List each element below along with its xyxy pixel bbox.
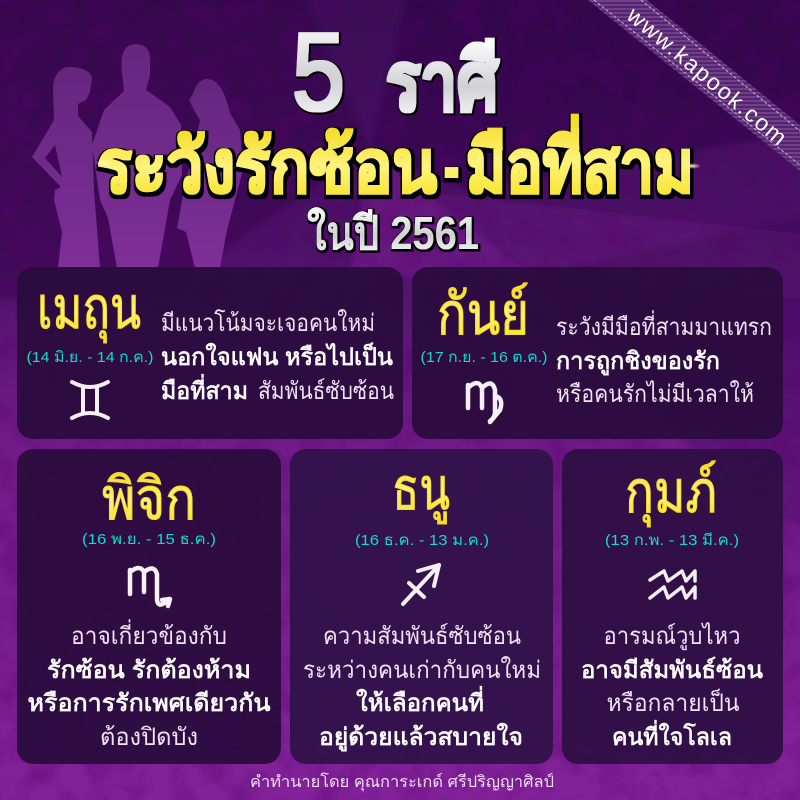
description: อารมณ์วูบไหว xyxy=(604,622,740,651)
sign name: ธนู xyxy=(392,457,450,524)
ribbon: www.kapook.com xyxy=(588,0,800,171)
icon: aquarius xyxy=(650,571,695,598)
description: ต้องปิดบัง xyxy=(100,724,198,751)
icon: sagittarius xyxy=(403,565,439,604)
description: มือที่สาม xyxy=(161,374,248,405)
panel: พิจิก xyxy=(17,449,281,764)
sign name: พิจิก xyxy=(102,467,196,532)
panel: กุมภ์ xyxy=(562,449,783,764)
description: การถูกชิงของรัก xyxy=(556,348,720,376)
icon: virgo xyxy=(468,383,501,422)
icon: gemini xyxy=(72,382,108,418)
date range: (14 มิ.ย. - 14 ก.ค.) xyxy=(26,349,154,366)
silhouette: left woman xyxy=(32,67,100,268)
silhouettes: three people xyxy=(32,44,243,268)
panel: เมถุน xyxy=(17,267,403,439)
title: ระวังรักซ้อน-มือที่สาม: มือที่สาม xyxy=(466,114,694,208)
footer credit: คำทำนายโดย คุณการะเกด์ ศรีปริญญาศิลป์ xyxy=(250,772,554,792)
silhouette: right woman xyxy=(177,79,243,268)
title: ระวังรักซ้อน-มือที่สาม: ระวังรักซ้อน xyxy=(97,125,437,208)
date range: (17 ก.ย. - 16 ต.ค.) xyxy=(420,349,548,366)
title: ระวังรักซ้อน-มือที่สาม xyxy=(95,114,701,208)
title: ระวังรักซ้อน-มือที่สาม: - xyxy=(444,125,459,208)
description: คนที่ใจโลเล xyxy=(612,720,732,751)
description xyxy=(581,622,763,751)
title: 5 ราศี xyxy=(292,11,500,134)
title: 5 ราศี: ราศี xyxy=(386,37,500,128)
description xyxy=(28,619,270,751)
description xyxy=(556,310,772,408)
description: อาจมีสัมพันธ์ซ้อน xyxy=(581,656,763,684)
panel: กันย์ xyxy=(412,267,783,439)
description xyxy=(303,622,541,752)
description: ระหว่างคนเก่ากับคนใหม่ xyxy=(303,656,541,684)
description: อยู่ด้วยแล้วสบายใจ xyxy=(319,723,523,752)
description: อาจเกี่ยวข้องกับ xyxy=(71,619,227,650)
date range: (16 พ.ย. - 15 ธ.ค.) xyxy=(82,531,216,548)
sign name: เมถุน xyxy=(37,276,141,344)
ribbon: www.kapook.com: www.kapook.com xyxy=(621,1,792,150)
description: หรือคนรักไม่มีเวลาให้ xyxy=(556,380,754,408)
date range: (13 ก.พ. - 13 มี.ค.) xyxy=(605,532,739,549)
description: รักซ้อน รักต้องห้าม xyxy=(47,657,251,684)
description: ให้เลือกคนที่ xyxy=(356,686,484,717)
description xyxy=(161,309,394,405)
description: หรือกลายเป็น xyxy=(606,688,740,717)
description: ระวังมีมือที่สามมาแทรก xyxy=(556,310,772,341)
icon: scorpio xyxy=(130,568,170,606)
description: นอกใจแฟน หรือไปเป็น xyxy=(161,342,393,371)
description: มีแนวโน้มจะเจอคนใหม่ xyxy=(161,309,375,337)
description: ความสัมพันธ์ซับซ้อน xyxy=(323,622,521,650)
silhouette: centre man xyxy=(92,44,182,268)
description: หรือการรักเพศเดียวกัน xyxy=(28,690,270,717)
description: สัมพันธ์ซับซ้อน xyxy=(258,377,394,405)
title: ในปี 2561: ในปี 2561 xyxy=(307,206,479,259)
panel: ธนู xyxy=(290,449,553,764)
date range: (16 ธ.ค. - 13 ม.ค.) xyxy=(355,532,489,549)
title: 5 ราศี: 5 xyxy=(292,11,345,134)
sign name: กุมภ์ xyxy=(625,460,717,528)
sign name: กันย์ xyxy=(437,282,529,347)
